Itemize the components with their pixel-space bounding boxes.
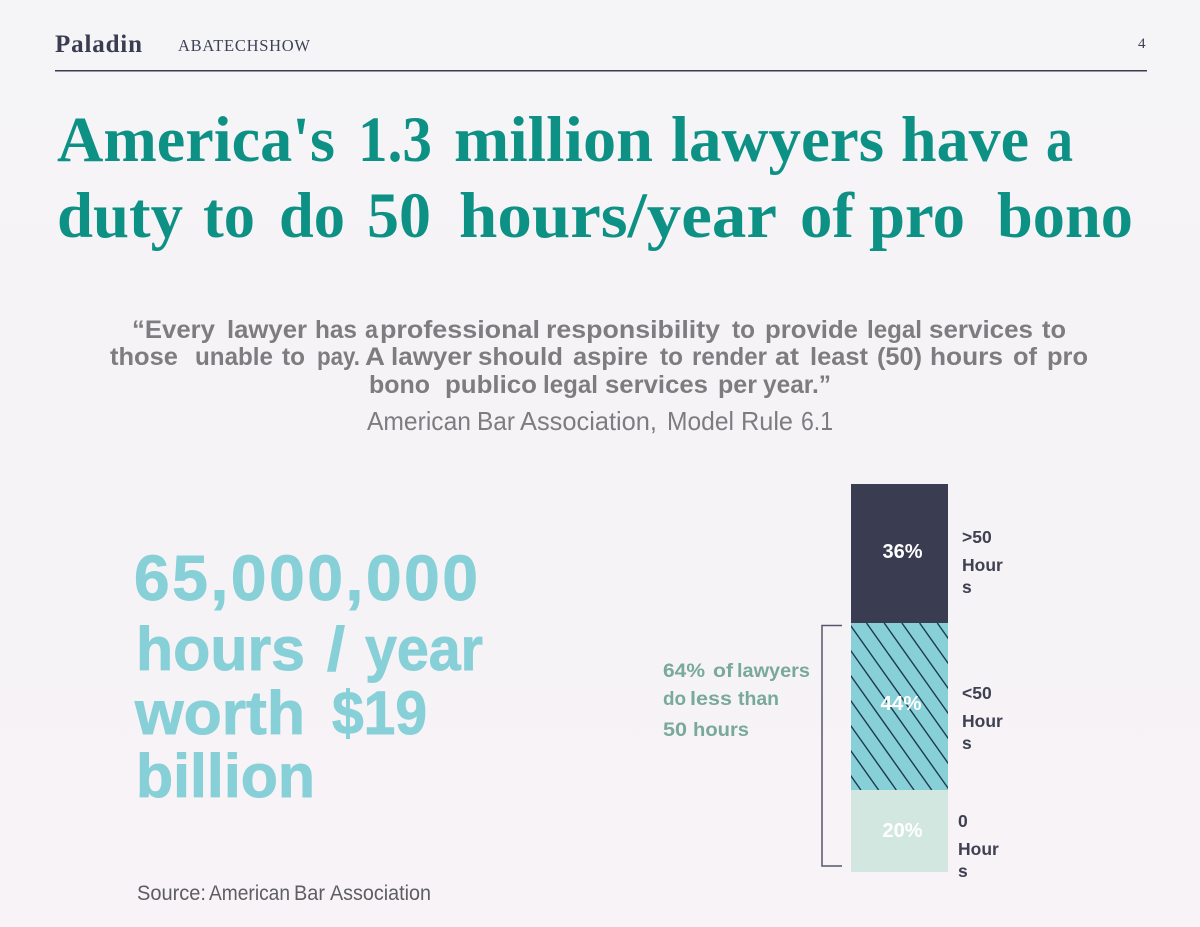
- quote: per: [718, 371, 757, 399]
- title: pro: [869, 180, 965, 252]
- label: more than 50 hours: Hour: [962, 555, 1003, 575]
- quote: aspire: [573, 343, 648, 371]
- quote: pro: [1047, 343, 1088, 371]
- segment: less than 50 hours: 44%: [880, 692, 922, 715]
- label: less than 50 hours: Hour: [962, 711, 1003, 731]
- label: more than 50 hours: >50: [962, 527, 992, 547]
- quote: [110, 316, 1088, 399]
- quote attribution: Association,: [520, 406, 657, 436]
- big statistic: [134, 542, 483, 810]
- label: less than 50 hours: <50: [962, 683, 992, 703]
- quote: year.”: [763, 371, 831, 399]
- label: less than 50 hours: [962, 683, 1003, 753]
- quote: a: [365, 316, 379, 344]
- page number: 4: [1138, 36, 1146, 52]
- quote: to: [660, 343, 683, 371]
- callout: 64% of lawyers: [663, 660, 810, 741]
- quote: lawyer: [391, 343, 472, 371]
- label: 0 hours: s: [958, 861, 968, 881]
- quote: render: [692, 343, 767, 371]
- source: Source:: [137, 881, 206, 905]
- quote: to: [732, 316, 755, 344]
- segment: more than 50 hours: 36%: [882, 541, 923, 563]
- title: 50: [367, 180, 431, 252]
- big statistic: billion: [136, 742, 315, 810]
- callout: 64% of lawyers: of: [713, 660, 734, 682]
- quote attribution: American: [367, 406, 471, 436]
- title: duty: [57, 180, 183, 252]
- quote: least: [810, 343, 869, 371]
- quote: responsibility: [546, 316, 720, 344]
- quote attribution: Model: [667, 406, 734, 436]
- quote attribution: 6.1: [801, 406, 833, 436]
- quote: publico: [445, 371, 537, 399]
- callout: 64% of lawyers: less: [690, 688, 732, 710]
- segment: 0 hours: 20%: [882, 820, 923, 842]
- quote attribution: Rule: [741, 406, 793, 436]
- source: [137, 881, 431, 905]
- quote: services: [929, 316, 1033, 344]
- title: of: [800, 180, 855, 252]
- quote attribution: Bar: [477, 406, 515, 436]
- quote: hours: [930, 343, 1003, 371]
- quote: to: [1042, 316, 1066, 344]
- quote: of: [1013, 343, 1038, 371]
- title: lawyers: [671, 104, 884, 176]
- title: million: [454, 104, 653, 176]
- quote: legal: [867, 316, 922, 344]
- source: Bar: [294, 881, 325, 905]
- quote: “Every: [132, 316, 215, 344]
- title: hours/year: [459, 180, 777, 252]
- quote: services: [605, 371, 708, 399]
- callout: 64% of lawyers: hours: [693, 719, 749, 741]
- big statistic: year: [365, 615, 483, 683]
- big statistic: worth: [134, 679, 305, 747]
- title: America's: [57, 104, 335, 176]
- quote attribution: [367, 406, 833, 436]
- big statistic: hours: [136, 615, 305, 683]
- brand name: Paladin: [55, 31, 142, 58]
- title: do: [279, 180, 345, 252]
- quote: to: [282, 343, 305, 371]
- quote: has: [315, 316, 357, 344]
- big statistic: /: [327, 615, 345, 683]
- quote: professional: [380, 316, 540, 344]
- big statistic: $19: [332, 679, 427, 747]
- header rule: [55, 70, 1147, 72]
- callout: 64% of lawyers: than: [738, 688, 779, 710]
- title: 1.3: [358, 104, 432, 176]
- title: [57, 104, 1133, 252]
- title: to: [203, 180, 255, 252]
- quote: unable: [195, 343, 273, 371]
- label: less than 50 hours: s: [962, 733, 972, 753]
- big statistic: 65,000,000: [134, 542, 478, 614]
- quote: those: [110, 343, 178, 371]
- event name: ABATECHSHOW: [178, 36, 310, 55]
- source: American: [209, 881, 290, 905]
- callout: 64% of lawyers: lawyers: [737, 660, 810, 682]
- source: Association: [330, 881, 431, 905]
- quote: should: [478, 343, 563, 371]
- quote: legal: [543, 371, 598, 399]
- label: 0 hours: 0: [958, 811, 968, 831]
- stacked bar chart: [851, 484, 948, 872]
- title: have: [901, 104, 1029, 176]
- callout: 64% of lawyers: do: [663, 688, 686, 710]
- title: bono: [997, 180, 1133, 252]
- quote: A: [365, 343, 385, 371]
- callout: 64% of lawyers: 50: [663, 719, 687, 741]
- quote: bono: [369, 371, 430, 399]
- label: 0 hours: Hour: [958, 839, 999, 859]
- segment: less than 50 hours: [851, 623, 948, 790]
- segment: 0 hours: [851, 790, 948, 872]
- label: more than 50 hours: [962, 527, 1003, 597]
- header: [55, 31, 1147, 72]
- callout: 64% of lawyers: 64%: [663, 660, 705, 682]
- label: 0 hours: [958, 811, 999, 881]
- segment: more than 50 hours: [851, 484, 948, 623]
- quote: provide: [765, 316, 858, 344]
- label: more than 50 hours: s: [962, 577, 972, 597]
- quote: pay.: [317, 343, 360, 371]
- quote: at: [775, 343, 800, 371]
- quote: (50): [877, 343, 922, 371]
- bracket: [822, 626, 842, 866]
- quote: lawyer: [227, 316, 307, 344]
- title: a: [1046, 104, 1073, 176]
